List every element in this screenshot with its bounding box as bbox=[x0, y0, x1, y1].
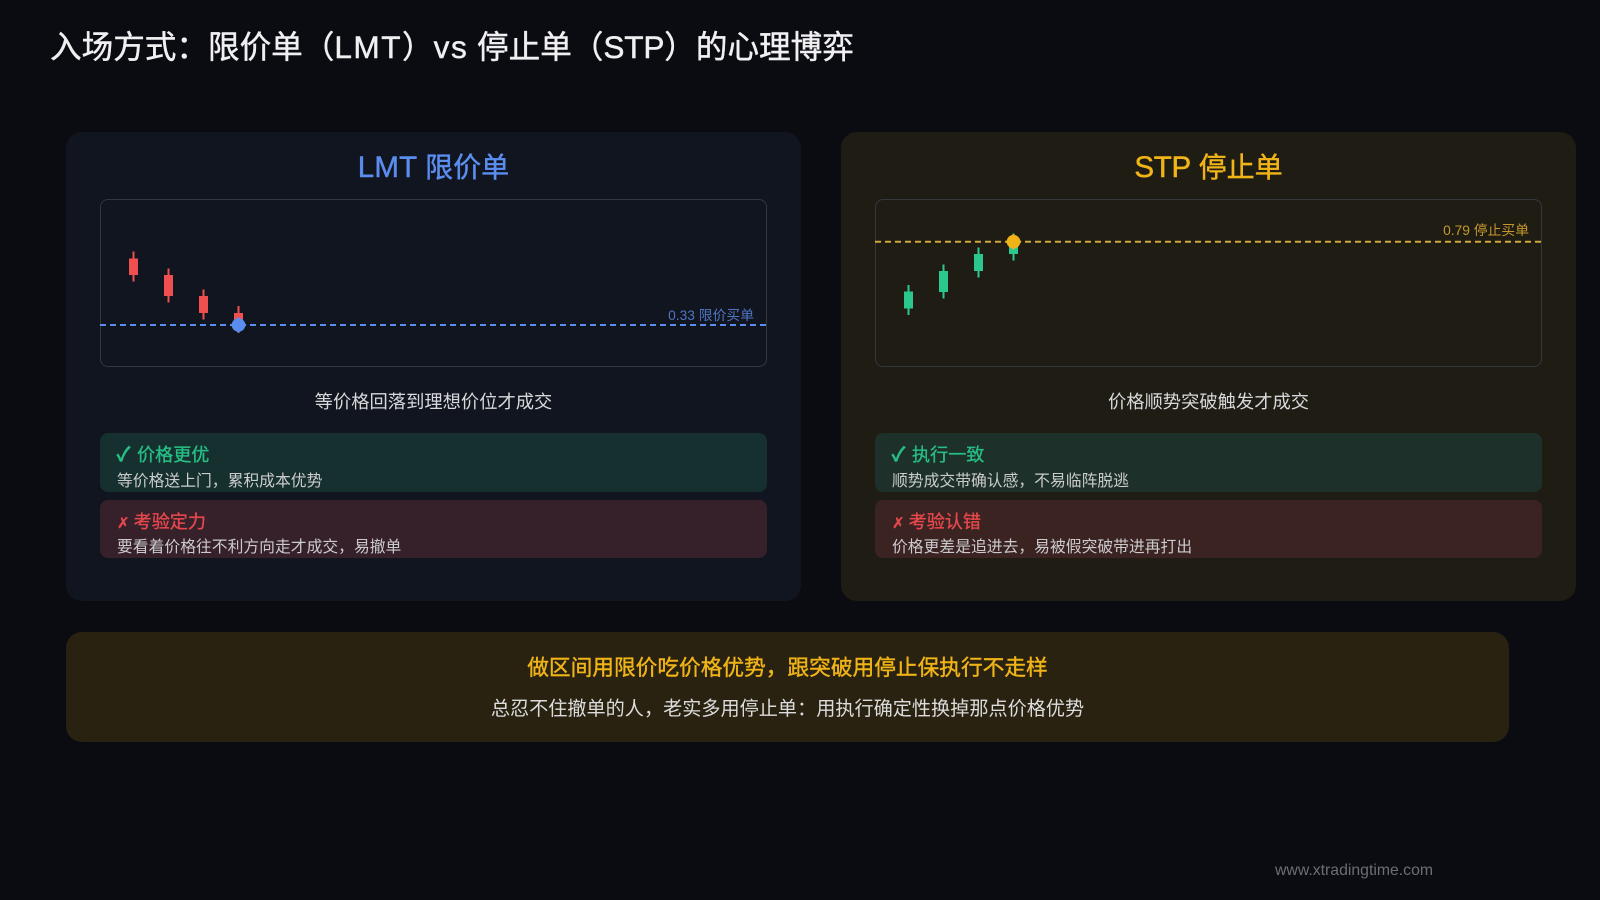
callout headline: 做区间用限价吃价格优势，跟突破用停止保执行不走样 bbox=[527, 655, 1048, 680]
callout bbox=[66, 632, 1509, 742]
pro title: ✓ 价格更优 bbox=[117, 445, 209, 466]
callout body: 总忍不住撤单的人，老实多用停止单：用执行确定性换掉那点价格优势 bbox=[491, 699, 1084, 720]
pro text: 等价格送上门，累积成本优势 bbox=[117, 472, 322, 490]
caption: LMT: 等价格回落到理想价位才成交 bbox=[315, 391, 552, 412]
con title: ✗ 考验认错 bbox=[892, 512, 981, 532]
chart: STP bbox=[874, 199, 1542, 367]
chart drawing: STP candles: 0.79 停止买单 bbox=[1443, 222, 1529, 238]
panel: STP bbox=[841, 132, 1576, 601]
caption: STP: 价格顺势突破触发才成交 bbox=[1108, 391, 1309, 412]
chart: LMT bbox=[100, 199, 767, 367]
chart drawing: LMT candles bbox=[100, 252, 766, 333]
chart drawing: STP candles bbox=[875, 222, 1541, 315]
chart drawing: LMT candles: 0.33 限价买单 bbox=[668, 308, 754, 323]
con title: ✗ 考验定力 bbox=[117, 512, 206, 532]
pro text: 顺势成交带确认感，不易临阵脱逃 bbox=[892, 472, 1129, 490]
con text: 价格更差是追进去，易被假突破带进再打出 bbox=[892, 539, 1192, 556]
con box: STP bbox=[875, 500, 1542, 558]
con text: 要看着价格往不利方向走才成交，易撤单 bbox=[117, 539, 401, 556]
heading: STP: STP 停止单 bbox=[1134, 151, 1283, 184]
panel: LMT bbox=[66, 132, 801, 601]
title: 入场方式：限价单（LMT）vs 停止单（STP）的心理博弈 bbox=[50, 29, 854, 65]
pro title: ✓ 执行一致 bbox=[892, 445, 984, 466]
pro box: STP bbox=[875, 433, 1542, 492]
heading: LMT: LMT 限价单 bbox=[358, 151, 509, 184]
watermark: www.xtradingtime.com bbox=[1275, 862, 1433, 879]
pro box: LMT bbox=[100, 433, 767, 492]
con box: LMT bbox=[100, 500, 767, 558]
